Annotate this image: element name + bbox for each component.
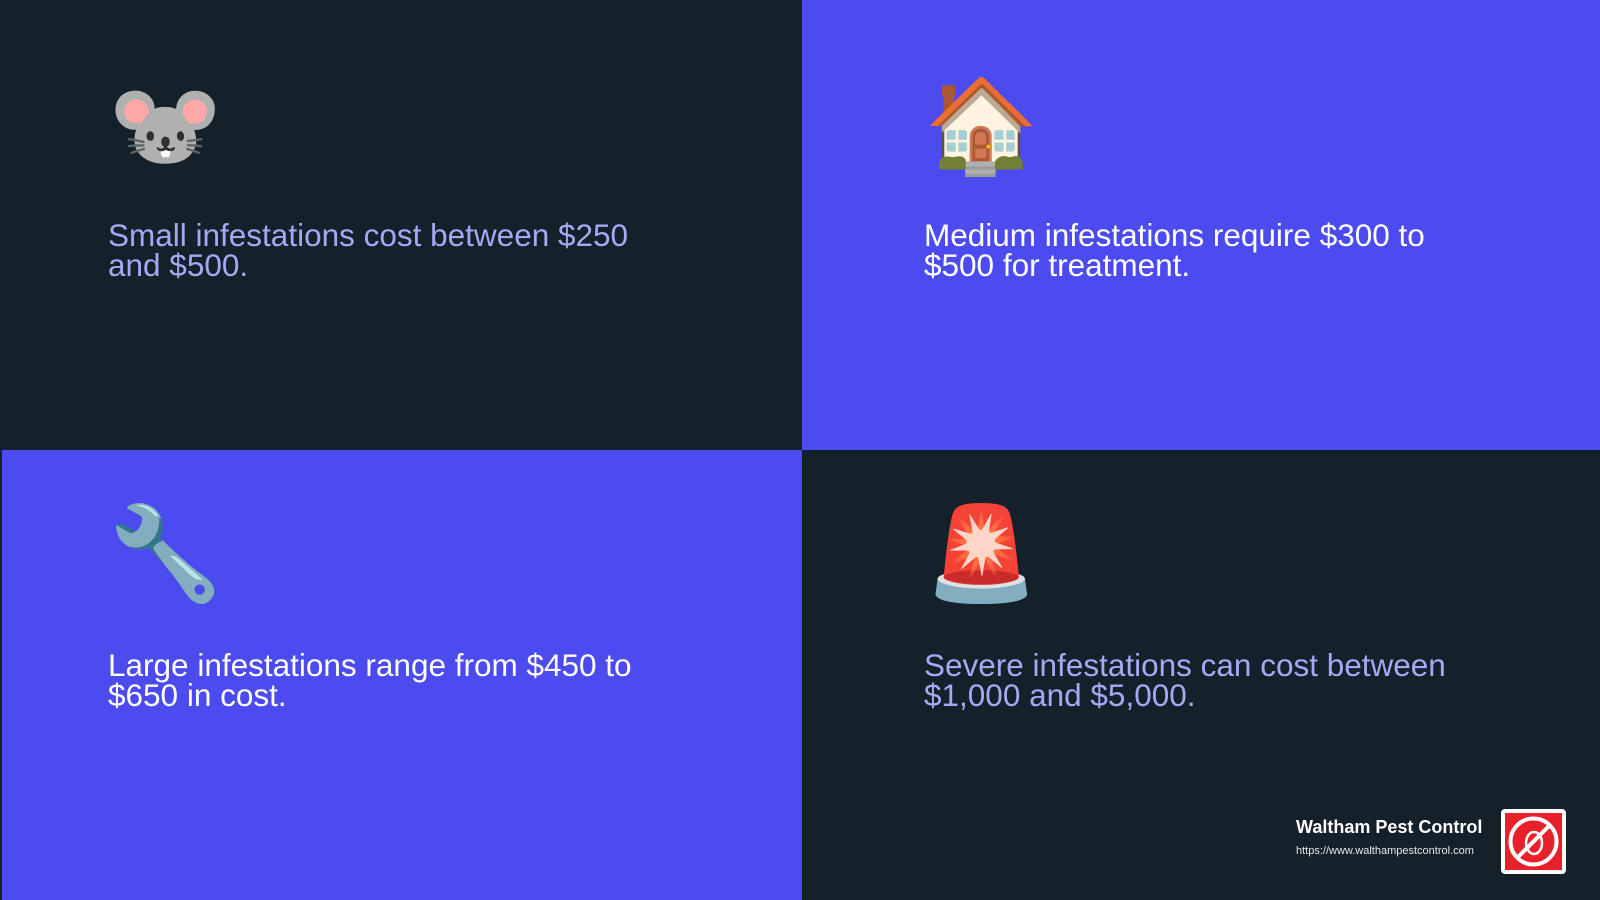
icon: wrench: 🔧: [108, 501, 223, 608]
icon: mouse: 🐭: [108, 73, 223, 180]
brand text: [1296, 817, 1482, 857]
text: small: Small infestations cost between $250 and $500.: [108, 217, 628, 283]
icon: house: 🏠: [924, 73, 1039, 180]
panel: small: [0, 0, 800, 450]
panel: large: [2, 450, 802, 900]
text: large: Large infestations range from $450 to $650 in cost.: [108, 647, 632, 713]
icon: siren: 🚨: [924, 501, 1039, 608]
panel: severe: [802, 450, 1600, 900]
text: severe: Severe infestations can cost between $1,000 and $5,000.: [924, 647, 1446, 713]
logo: [1501, 809, 1566, 874]
panel: medium: [802, 0, 1600, 450]
brand text: Waltham Pest Control: [1296, 817, 1482, 837]
brand text: https://www.walthampestcontrol.com: [1296, 845, 1474, 857]
text: medium: Medium infestations require $300 to $500 for treatment.: [924, 217, 1425, 283]
